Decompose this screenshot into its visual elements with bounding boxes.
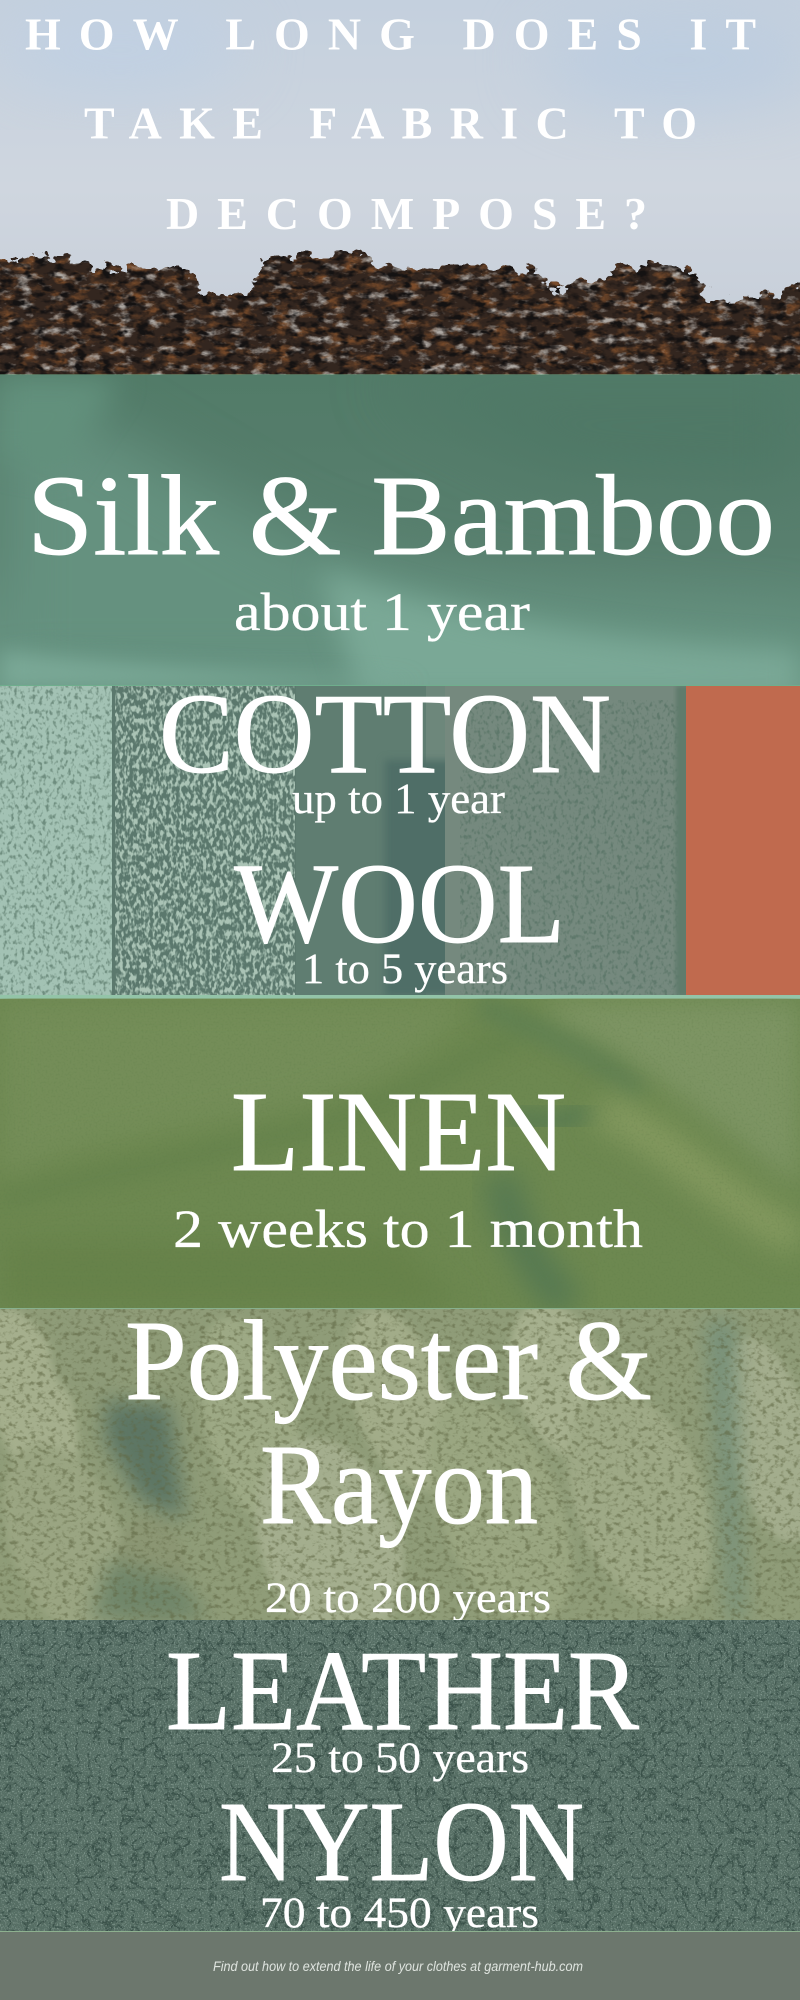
text: about 1 year: about 1 year: [234, 582, 530, 642]
heading: leather: LEATHER: [166, 1627, 639, 1754]
heading: wool: WOOL: [234, 840, 565, 967]
panel: cotton and wool: [0, 670, 800, 996]
heading: cotton: COTTON: [159, 670, 611, 797]
heading: nylon: NYLON: [219, 1778, 584, 1905]
heading: polyester and rayon: [125, 1297, 652, 1548]
panel: hero landfill photo with title: [0, 0, 800, 395]
heading: silk and bamboo: Silk & Bamboo: [27, 452, 775, 579]
text: 2 weeks to 1 month: 2 weeks to 1 month: [173, 1199, 643, 1259]
text: footer link: Find out how to extend the life of your clothes at garment-hub.com: [213, 1959, 583, 1974]
panel: polyester and rayon: [0, 1309, 800, 1620]
panel: leather and nylon: [0, 1620, 800, 1937]
icon: heap of waste: [0, 250, 800, 374]
title: [25, 8, 756, 239]
panel: linen: [0, 999, 800, 1308]
title: HOW LONG DOES IT: [25, 8, 756, 60]
panel: silk and bamboo: [0, 375, 800, 700]
text: 1 to 5 years: 1 to 5 years: [302, 946, 508, 993]
heading: linen: LINEN: [231, 1068, 566, 1195]
text: 25 to 50 years: 25 to 50 years: [271, 1735, 529, 1782]
heading: polyester and rayon: Rayon: [260, 1421, 538, 1548]
text: 70 to 450 years: 70 to 450 years: [260, 1890, 539, 1937]
text: up to 1 year: up to 1 year: [292, 776, 505, 823]
panel: footer: [0, 1932, 800, 2000]
title: TAKE FABRIC TO: [84, 98, 697, 148]
heading: polyester and rayon: Polyester &: [125, 1297, 652, 1424]
title: DECOMPOSE?: [166, 188, 647, 239]
text: 20 to 200 years: 20 to 200 years: [265, 1575, 551, 1622]
